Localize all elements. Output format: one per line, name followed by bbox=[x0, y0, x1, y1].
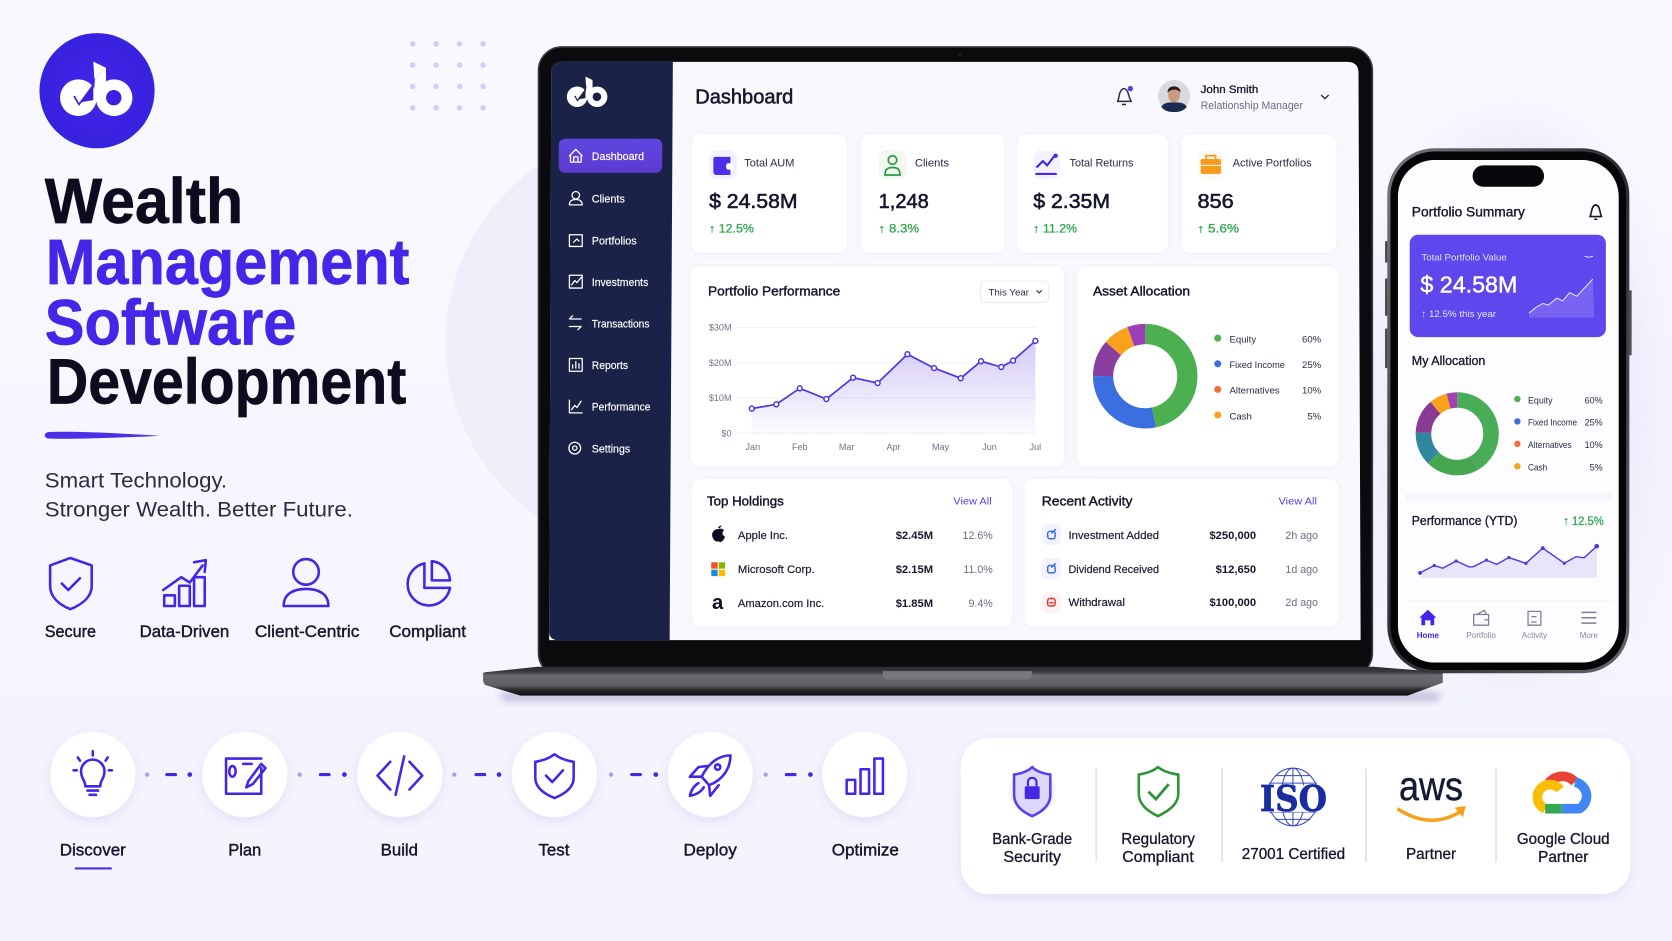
feature: Client-Centric: Client-Centric bbox=[255, 622, 360, 641]
panel: portfolio performance: Portfolio Performance bbox=[708, 284, 840, 299]
portfolio value card: ↑ 12.5% this year bbox=[1421, 309, 1497, 320]
line chart: $10M bbox=[709, 393, 732, 403]
brush underline bbox=[45, 432, 160, 439]
nav: Settings bbox=[569, 442, 630, 455]
phone legend: 10% bbox=[1585, 440, 1603, 450]
activity: Dividend Received: 1d ago bbox=[1285, 564, 1318, 576]
badge: AWS Partner bbox=[1397, 763, 1466, 863]
activity: Investment Added: 2h ago bbox=[1285, 530, 1318, 542]
step: Optimize: Optimize bbox=[832, 841, 899, 860]
badge: Regulatory Compliant: Regulatory bbox=[1121, 831, 1195, 848]
holding: Amazon: 9.4% bbox=[968, 598, 993, 610]
badge: Google Cloud Partner: Google Cloud bbox=[1517, 831, 1610, 848]
decorative circle behind laptop bbox=[446, 128, 872, 555]
phone legend: 25% bbox=[1585, 418, 1603, 428]
holding: Microsoft bbox=[711, 562, 993, 576]
line chart: $0 bbox=[721, 428, 732, 438]
KPI card: Clients: Clients bbox=[915, 157, 949, 169]
KPI card: Total Returns: Total Returns bbox=[1070, 157, 1134, 169]
badge: Google Cloud Partner: Partner bbox=[1538, 849, 1589, 866]
KPI card: Clients bbox=[861, 134, 1004, 253]
performance YTD: ↑ 12.5% bbox=[1563, 514, 1604, 528]
title: Wealth bbox=[45, 165, 243, 237]
line chart: $20M bbox=[709, 358, 732, 368]
step: Test: Test bbox=[538, 841, 570, 860]
line chart: May bbox=[932, 442, 950, 452]
badge: ISO 27001 Certified bbox=[1242, 768, 1345, 863]
nav: Portfolio bbox=[1466, 610, 1496, 640]
phone bezel bbox=[1390, 151, 1626, 670]
badge: ISO 27001 Certified: 27001 Certified bbox=[1242, 846, 1345, 863]
activity: Withdrawal: Withdrawal bbox=[1068, 597, 1125, 609]
logo badge bbox=[39, 33, 155, 148]
holding: Amazon: a bbox=[712, 592, 724, 614]
phone legend: Cash bbox=[1528, 462, 1547, 473]
KPI card: Total Returns bbox=[1017, 134, 1168, 253]
user name: Relationship Manager bbox=[1201, 100, 1303, 112]
allocation legend: 5% bbox=[1307, 411, 1322, 422]
my allocation: My Allocation bbox=[1412, 353, 1485, 368]
badge: Bank-Grade Security bbox=[992, 767, 1072, 866]
step: Deploy bbox=[668, 732, 753, 860]
KPI card: Active Portfolios bbox=[1181, 134, 1336, 253]
phone legend: 5% bbox=[1590, 462, 1603, 473]
section band bbox=[1405, 493, 1612, 500]
phone side buttons bbox=[1386, 241, 1630, 368]
KPI card: Active Portfolios: ↑ 5.6% bbox=[1197, 223, 1239, 236]
nav: Home: Home bbox=[1417, 631, 1439, 640]
base notch bbox=[883, 671, 1032, 680]
KPI card: Active Portfolios: 856 bbox=[1197, 191, 1234, 213]
panel: recent activity bbox=[1025, 479, 1338, 626]
donut chart bbox=[1103, 334, 1187, 418]
step: Test bbox=[512, 732, 597, 860]
activity: Withdrawal: $100,000 bbox=[1209, 597, 1256, 609]
connector dots bbox=[145, 772, 813, 777]
line chart: Jan bbox=[746, 442, 760, 452]
holding: Microsoft: $2.15M bbox=[896, 564, 933, 576]
activity: Withdrawal bbox=[1042, 592, 1318, 613]
laptop lid bbox=[538, 47, 1372, 676]
badge: Regulatory Compliant: Compliant bbox=[1122, 849, 1194, 866]
activity: Investment Added: $250,000 bbox=[1209, 530, 1256, 542]
nav: Investments bbox=[569, 275, 648, 289]
step: Optimize bbox=[822, 732, 907, 860]
portfolio value card: $ 24.58M bbox=[1420, 271, 1517, 297]
KPI card: Total AUM: ↑ 12.5% bbox=[709, 223, 754, 236]
line chart: Feb bbox=[792, 442, 808, 452]
allocation legend: 10% bbox=[1302, 386, 1322, 397]
allocation legend: Fixed Income bbox=[1229, 360, 1285, 371]
KPI card: Clients: ↑ 8.3% bbox=[879, 223, 919, 236]
nav: Portfolio: Portfolio bbox=[1466, 631, 1496, 640]
holding: Apple: 12.6% bbox=[963, 530, 993, 542]
laptop base shadow bbox=[501, 693, 1440, 700]
tagline bbox=[45, 469, 353, 521]
holding: Amazon: Amazon.com Inc. bbox=[738, 598, 824, 610]
step: Deploy: Deploy bbox=[684, 841, 737, 860]
holding: Amazon bbox=[712, 592, 993, 614]
line chart bbox=[709, 323, 1041, 452]
panel: recent activity: Recent Activity bbox=[1042, 494, 1133, 509]
KPI card: Clients: 1,248 bbox=[879, 191, 929, 213]
process row bbox=[50, 732, 907, 870]
holding: Apple bbox=[712, 525, 993, 542]
KPI card: Total Returns: ↑ 11.2% bbox=[1033, 223, 1077, 236]
phone screen bbox=[1398, 160, 1619, 663]
activity: Investment Added bbox=[1042, 524, 1318, 545]
feature: Client-Centric bbox=[255, 559, 360, 641]
phone legend bbox=[1514, 395, 1603, 473]
period selector bbox=[980, 281, 1049, 302]
line chart: $30M bbox=[709, 323, 732, 333]
panel: recent activity: View All bbox=[1279, 497, 1317, 508]
allocation legend: Alternatives bbox=[1229, 386, 1280, 397]
badge: AWS Partner: aws bbox=[1399, 763, 1463, 809]
nav: Transactions: Transactions bbox=[592, 319, 649, 331]
allocation legend: Equity bbox=[1229, 334, 1256, 345]
holding: Microsoft: Microsoft Corp. bbox=[738, 564, 815, 576]
KPI card: Total AUM: $ 24.58M bbox=[709, 191, 798, 213]
badge: AWS Partner: Partner bbox=[1406, 846, 1457, 863]
panel: top holdings: View All bbox=[953, 497, 992, 508]
nav: Activity: Activity bbox=[1522, 631, 1547, 640]
sidebar logo bbox=[567, 77, 607, 107]
laptop base bbox=[483, 667, 1443, 696]
allocation legend: Cash bbox=[1229, 411, 1252, 422]
KPI card: Total Returns: $ 2.35M bbox=[1033, 191, 1110, 213]
activity: Dividend Received bbox=[1042, 558, 1318, 579]
feature: Data-Driven bbox=[140, 560, 229, 641]
line chart: Apr bbox=[887, 442, 901, 452]
badge: Bank-Grade Security: Bank-Grade bbox=[992, 831, 1072, 848]
tagline: Smart Technology. bbox=[45, 469, 227, 493]
portfolio value card bbox=[1410, 235, 1606, 337]
phone body bbox=[1387, 148, 1629, 673]
panel: portfolio performance bbox=[691, 267, 1064, 466]
tagline: Stronger Wealth. Better Future. bbox=[45, 497, 353, 521]
phone bell bbox=[1590, 205, 1602, 219]
user avatar bbox=[1158, 80, 1190, 112]
phone legend: 60% bbox=[1585, 395, 1603, 405]
nav: Portfolios bbox=[569, 235, 637, 247]
soft glow behind phone bbox=[1376, 128, 1653, 683]
trust badges panel bbox=[961, 738, 1630, 894]
phone heading: Portfolio Summary bbox=[1412, 204, 1525, 220]
line chart: Mar bbox=[839, 442, 854, 452]
phone legend: Equity bbox=[1528, 395, 1553, 405]
dynamic island bbox=[1473, 165, 1544, 187]
phone legend: Fixed Income bbox=[1528, 418, 1577, 428]
nav: Transactions bbox=[569, 316, 649, 331]
nav: Reports bbox=[569, 358, 628, 372]
screen bbox=[549, 62, 1361, 640]
activity: Investment Added: Investment Added bbox=[1068, 530, 1159, 542]
feature: Compliant bbox=[389, 561, 466, 641]
nav: Performance: Performance bbox=[592, 402, 651, 414]
step: Plan bbox=[202, 732, 287, 860]
nav: Investments: Investments bbox=[592, 277, 648, 289]
dashboard heading: Dashboard bbox=[695, 86, 793, 108]
phone bottom nav bbox=[1405, 601, 1612, 640]
allocation legend: 60% bbox=[1302, 334, 1322, 345]
phone donut bbox=[1423, 400, 1491, 468]
nav: Performance bbox=[569, 400, 651, 414]
step: Plan: Plan bbox=[228, 841, 261, 860]
nav: Clients bbox=[569, 192, 625, 206]
KPI card: Total AUM bbox=[692, 134, 847, 253]
nav: Portfolios: Portfolios bbox=[592, 235, 637, 247]
holding: Apple: $2.45M bbox=[896, 530, 933, 542]
step: Discover: Discover bbox=[60, 841, 126, 860]
holding: Microsoft: 11.0% bbox=[963, 564, 993, 576]
panel: asset allocation bbox=[1077, 267, 1338, 466]
badge: Regulatory Compliant bbox=[1121, 767, 1195, 866]
panel: top holdings bbox=[692, 479, 1012, 626]
phone legend: Alternatives bbox=[1528, 440, 1572, 450]
title: Software bbox=[45, 287, 296, 359]
nav: Settings: Settings bbox=[592, 443, 630, 455]
nav: Clients: Clients bbox=[592, 194, 625, 206]
step: Discover bbox=[50, 732, 135, 870]
user name: John Smith bbox=[1201, 84, 1258, 96]
notification bell bbox=[1118, 86, 1133, 105]
phone bbox=[1386, 148, 1630, 673]
activity: Dividend Received: Dividend Received bbox=[1068, 564, 1159, 576]
feature: Compliant: Compliant bbox=[389, 622, 466, 641]
sidebar bbox=[549, 62, 673, 640]
nav: More: More bbox=[1580, 631, 1598, 640]
active nav pill bbox=[559, 139, 662, 173]
laptop bbox=[483, 47, 1443, 700]
period selector: This Year bbox=[988, 288, 1030, 299]
badge: ISO 27001 Certified: ISO bbox=[1260, 779, 1327, 820]
user menu chevron bbox=[1321, 95, 1329, 99]
KPI card: Active Portfolios: Active Portfolios bbox=[1233, 157, 1312, 169]
line chart: Jun bbox=[982, 442, 997, 452]
panel: asset allocation: Asset Allocation bbox=[1093, 284, 1190, 299]
activity: Withdrawal: 2d ago bbox=[1285, 597, 1318, 609]
my allocation bbox=[1412, 353, 1603, 473]
panel: top holdings: Top Holdings bbox=[707, 494, 784, 509]
user name bbox=[1201, 84, 1303, 112]
nav: Dashboard: Dashboard bbox=[592, 151, 644, 163]
dot grid bbox=[410, 41, 486, 111]
webcam bbox=[958, 53, 961, 57]
feature: Secure bbox=[45, 558, 96, 641]
title bbox=[45, 165, 409, 417]
feature: Secure: Secure bbox=[45, 622, 96, 641]
nav: Reports: Reports bbox=[592, 360, 628, 372]
performance YTD bbox=[1412, 513, 1604, 578]
nav: Activity bbox=[1522, 611, 1547, 640]
holding: Amazon: $1.85M bbox=[896, 598, 933, 610]
nav: More bbox=[1580, 612, 1598, 640]
badge: Google Cloud Partner bbox=[1517, 776, 1610, 866]
activity: Dividend Received: $12,650 bbox=[1216, 564, 1256, 576]
feature: Data-Driven: Data-Driven bbox=[140, 622, 229, 641]
KPI card: Total AUM: Total AUM bbox=[744, 157, 794, 169]
allocation legend bbox=[1214, 334, 1322, 422]
title: Development bbox=[47, 345, 406, 417]
step: Build: Build bbox=[381, 841, 418, 860]
nav: Dashboard bbox=[569, 149, 644, 163]
step: Build bbox=[357, 732, 443, 860]
nav: Home bbox=[1417, 610, 1439, 640]
holding: Apple: Apple Inc. bbox=[738, 530, 788, 542]
portfolio value card: Total Portfolio Value bbox=[1421, 252, 1507, 263]
badge: Bank-Grade Security: Security bbox=[1003, 849, 1061, 866]
allocation legend: 25% bbox=[1302, 360, 1322, 371]
line chart: Jul bbox=[1030, 442, 1041, 452]
title: Management bbox=[46, 226, 409, 298]
performance YTD: Performance (YTD) bbox=[1412, 513, 1517, 528]
